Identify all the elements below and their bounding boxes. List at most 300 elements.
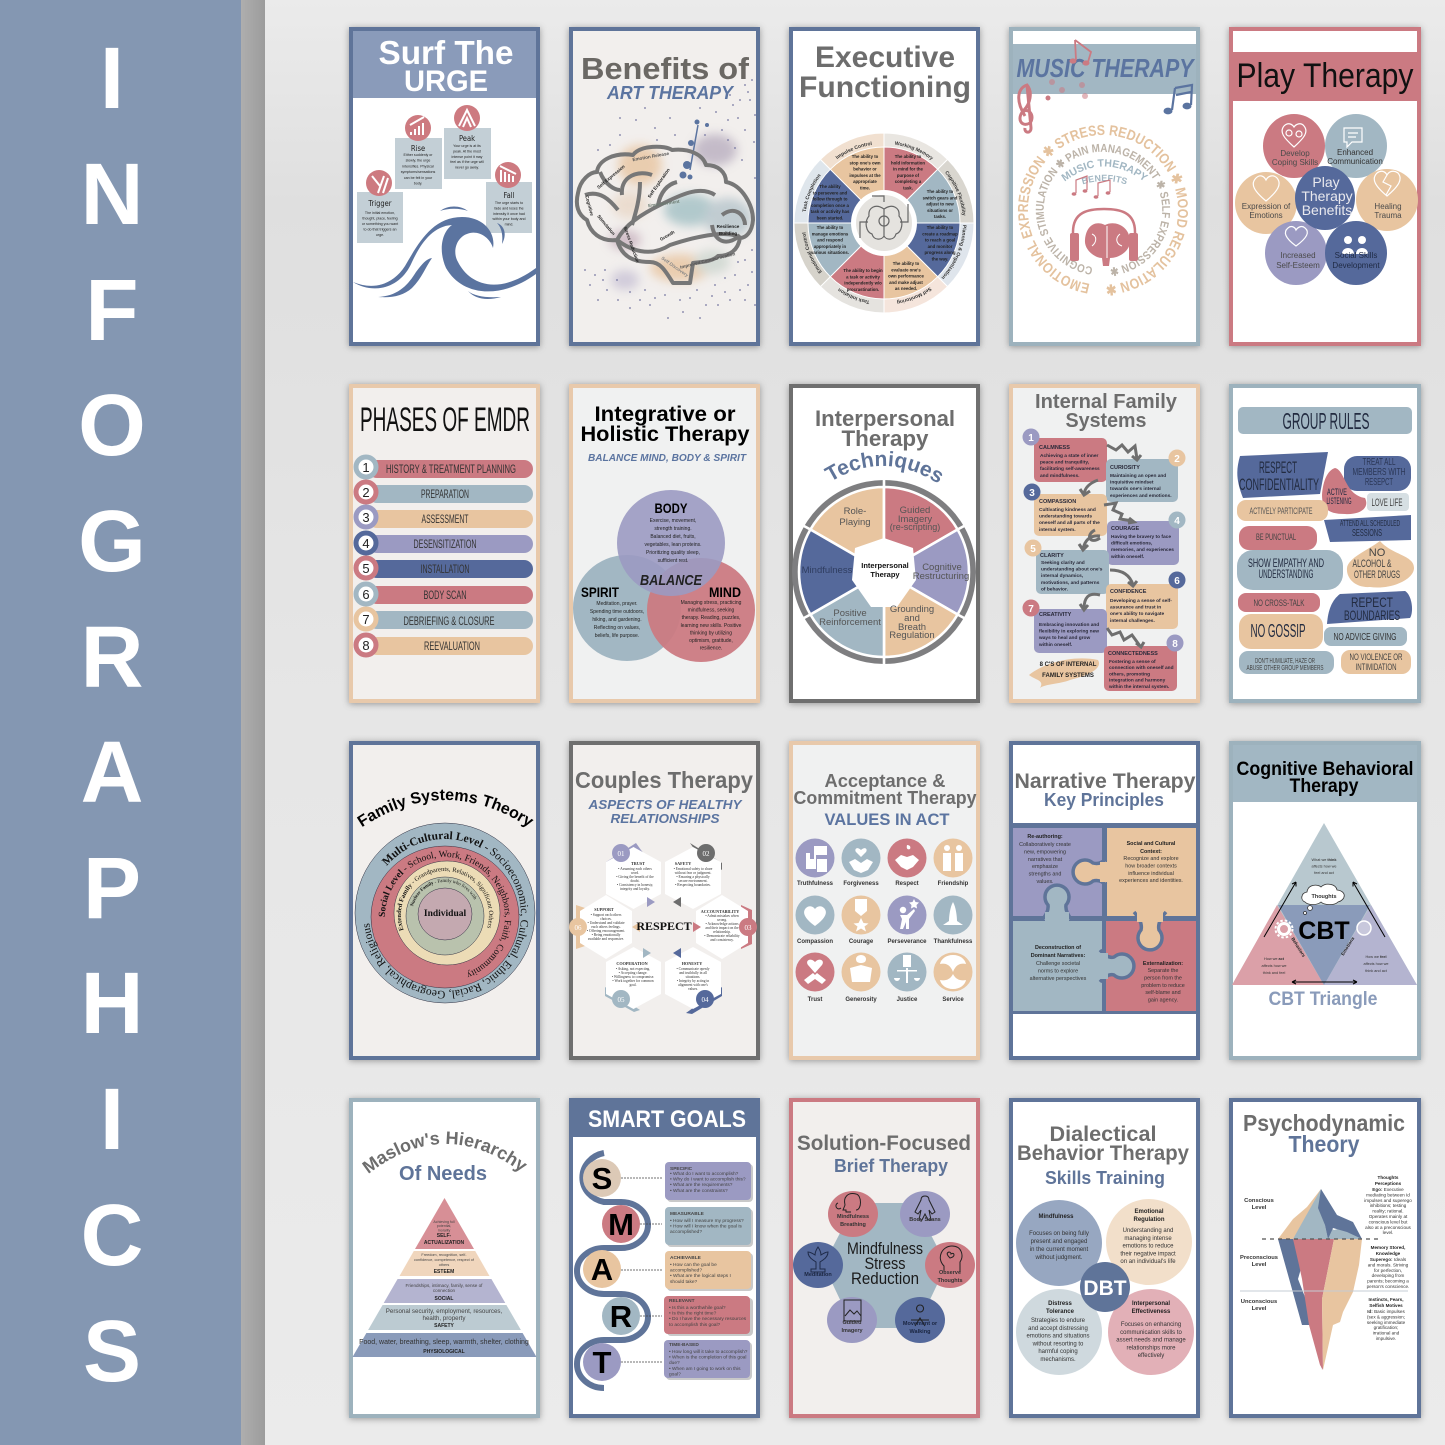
box text: towards one's internal [1110, 486, 1161, 492]
heading: Dialectical [1050, 1123, 1156, 1146]
brain labels: Cognitive [584, 195, 595, 217]
box text: integration and harmony [1109, 678, 1166, 684]
pyramid text: Achieving full [433, 1220, 455, 1224]
wheel descriptions: progress along [924, 250, 956, 255]
venn diagram: sufficient rest. [658, 558, 688, 564]
pyramid: PHYSIOLOGICAL [423, 1349, 465, 1355]
CBT triangle [1232, 823, 1417, 985]
footer label with brush stroke: FAMILY SYSTEMS [1042, 673, 1094, 679]
step text: thought, place, feeling [362, 216, 398, 220]
value icons [804, 845, 966, 989]
heading: Surf The [378, 34, 514, 71]
step text: Rise [411, 144, 425, 153]
puzzle text: narratives that [1028, 857, 1063, 863]
card: Couples Therapy [569, 742, 760, 1061]
heading: Acceptance & [824, 771, 946, 791]
phase bars: DEBRIEFING & CLOSURE [404, 614, 494, 628]
pyramid text: others [439, 1263, 449, 1267]
rule text: ACTIVE [1327, 487, 1347, 497]
header [1238, 407, 1412, 434]
wheel descriptions: adjust to new [926, 202, 954, 207]
step text: intensifies. Physical [402, 164, 434, 168]
phase bars: DESENSITIZATION [414, 537, 476, 551]
rule text: SESSIONS [1352, 527, 1382, 539]
rule text: RESEPCT [1365, 477, 1393, 488]
box text: motivations, and patterns [1041, 580, 1100, 586]
box text: and mindfulness. [1040, 473, 1079, 479]
pyramid: SAFETY [434, 1323, 455, 1329]
step text: mind. [505, 223, 513, 227]
rule text: LISTENING [1326, 496, 1352, 506]
hub label: Stress [864, 1254, 906, 1273]
hexagon text: values. [688, 987, 698, 991]
number badges: 7 [1028, 604, 1034, 615]
technique wheel: Regulation [889, 630, 935, 641]
skill circles: relationships more [1126, 1345, 1176, 1351]
puzzle text: Recognize and explore [1123, 856, 1179, 862]
wheel descriptions: The ability to [927, 189, 954, 194]
value labels: Truthfulness [797, 881, 834, 887]
venn diagram: mindfulness, seeking [688, 608, 735, 614]
hexagon text: • Giving the benefit of the [616, 875, 654, 879]
puzzle text: how broader contexts [1125, 863, 1177, 869]
heading: Maslow's Hierarchy [362, 1132, 527, 1174]
wheel descriptions: time. [860, 186, 870, 190]
step text [362, 134, 525, 237]
heading [794, 771, 976, 829]
flower labels: Healing [1374, 202, 1402, 211]
venn diagram: Exercise, movement, [650, 518, 696, 524]
hub label: Mindfulness [847, 1239, 923, 1258]
right annotations: gratification; [1374, 1325, 1398, 1330]
value labels: Thankfulness [934, 939, 973, 945]
box text: facilitating self-awareness [1040, 466, 1100, 472]
wheel ring labels: Working Memory [895, 141, 934, 160]
satellite labels: Body Scans [909, 1217, 941, 1223]
heading: Functioning [799, 71, 971, 104]
box text: within oneself. [1038, 642, 1072, 648]
value labels: Compassion [797, 939, 833, 945]
hexagon text: and truthfully in all [679, 971, 707, 975]
venn diagram: Meditation, prayer. [596, 601, 638, 607]
step text: within your body and [493, 217, 525, 221]
box text: internal dynamics, [1041, 573, 1084, 579]
value labels: Forgiveness [843, 881, 879, 887]
heading: Behavior Therapy [1017, 1142, 1189, 1165]
rule text: CONFIDENTIALITY [1239, 476, 1319, 494]
numbered badges: 06 [574, 924, 582, 932]
hexagon text: HONESTY [682, 961, 702, 966]
level labels: Level [1252, 1205, 1267, 1211]
technique wheel: Reinforcement [819, 617, 881, 628]
value circles [796, 838, 972, 992]
box text: COURAGE [1111, 526, 1139, 532]
technique wheel: Breath [898, 622, 926, 633]
technique wheel: Mindfulness [802, 565, 853, 576]
satellite labels: Imagery [841, 1328, 863, 1334]
number badges: 5 [1030, 544, 1036, 555]
heading: Benefits of [581, 51, 750, 86]
step text: Fall [503, 191, 515, 200]
flower icons [1253, 124, 1400, 246]
skill circles: on an individual's life [1120, 1259, 1176, 1265]
goal text: • When am I going to work on this [669, 1366, 741, 1372]
hexagon text: without fear or judgment. [675, 871, 711, 875]
rule text: NO GOSSIP [1250, 621, 1306, 641]
heading: Psychodynamic [1243, 1110, 1405, 1136]
card: Psychodynamic Theory [1229, 1099, 1421, 1419]
card: Internal Family Systems [1009, 385, 1200, 704]
right annotations: impulses and superego [1364, 1198, 1412, 1203]
value labels: Generosity [845, 997, 877, 1003]
puzzle text: Social and Cultural [1127, 841, 1176, 847]
right annotations: developing from [1372, 1273, 1405, 1278]
technique wheel: Interpersonal [861, 561, 909, 570]
rule text: NO CROSS-TALK [1254, 598, 1304, 608]
goal text: MEASURABLE [670, 1211, 705, 1217]
heading: ASPECTS OF HEALTHY [587, 797, 743, 812]
wheel ring labels: Cognitive Flexibility [946, 171, 966, 216]
goal text: due? [669, 1360, 680, 1366]
flower labels: Trauma [1374, 211, 1402, 220]
step text: symptoms/sensations [401, 170, 435, 174]
heading [815, 406, 955, 482]
goal text: • Is this the right time? [669, 1311, 717, 1317]
heading [575, 767, 753, 826]
wheel descriptions: The ability to [895, 154, 922, 159]
box text: one's ability to navigate [1110, 611, 1165, 617]
circular benefit text: MUSIC THERAPY [1061, 159, 1148, 182]
box text: others, promoting [1109, 671, 1150, 677]
hexagon text: word. [631, 871, 639, 875]
wheel descriptions: appropriately in [814, 244, 846, 249]
card: Maslow's Hierarchy of Needs [344, 1094, 544, 1424]
phase bars: ASSESSMENT [422, 512, 469, 526]
card: Solution-Focused Brief Therapy [789, 1099, 980, 1419]
brain labels [584, 151, 740, 278]
heading: Key Principles [1044, 790, 1164, 810]
venn diagram: thinking by utilizing [690, 630, 732, 636]
wheel descriptions: to persevere and [813, 190, 848, 195]
card: Narrative Therapy [1009, 742, 1200, 1061]
hexagon text: • Consistency in honesty, [617, 883, 653, 888]
skill circles: managing intense [1124, 1236, 1172, 1242]
triangle text: affects how we [1363, 962, 1389, 966]
hexagon text: choices. [600, 917, 612, 921]
skill circles: Mindfulness [1038, 1214, 1074, 1220]
right annotations: parents; becoming a [1367, 1279, 1409, 1284]
skill circles: effectively [1138, 1353, 1164, 1359]
card: Family Systems Theory [344, 738, 544, 1066]
wheel descriptions: impulses at the [849, 173, 881, 178]
pyramid [352, 1198, 536, 1357]
brain outline [577, 147, 753, 283]
goal text: • What are the constraints? [670, 1188, 728, 1194]
phase bars: 2 [362, 485, 370, 500]
number badges [1022, 428, 1186, 652]
hexagon text: wrong. [717, 918, 727, 922]
ring labels: Extended Family - Grandparents, Relatives, Significant Others [396, 867, 494, 932]
preconscious divider [1240, 1290, 1408, 1292]
box text: CURIOSITY [1110, 465, 1140, 471]
pyramid: ACTUALIZATION [424, 1240, 464, 1246]
wheel descriptions: behavior or [853, 167, 877, 172]
CBT triangle: Thoughts [1311, 894, 1337, 900]
level labels: Preconscious [1240, 1255, 1278, 1261]
box text [1038, 445, 1174, 690]
value labels: Service [942, 997, 964, 1003]
goal text: • How will I know when the goal is [670, 1224, 742, 1230]
goal text: TIME-BASED [669, 1342, 699, 1348]
pyramid: ESTEEM [434, 1269, 454, 1275]
skill circles: Distress [1048, 1301, 1072, 1307]
box text: experiences and emotions. [1110, 493, 1172, 499]
phase bars: BODY SCAN [424, 588, 466, 602]
wheel descriptions: and respond [817, 238, 843, 243]
step text: The urge starts to [495, 201, 523, 205]
skill circles: Focuses on enhancing [1121, 1322, 1181, 1328]
flower labels: Develop [1280, 149, 1310, 158]
hexagon text: • Understand and validate [587, 921, 625, 925]
puzzle text: experiences and identities. [1119, 878, 1183, 884]
rule text: LOVE LIFE [1372, 497, 1402, 509]
puzzle text: norms to explore [1038, 968, 1078, 974]
technique wheel: Therapy [870, 570, 900, 579]
triangle text: feel and act [1314, 871, 1335, 875]
skill circles: DBT [1083, 1277, 1127, 1300]
heading [581, 51, 750, 103]
heading: Therapy [842, 426, 929, 451]
puzzle text: influence individual [1128, 871, 1174, 877]
hexagon text: • Support each others [591, 913, 622, 917]
triangle caption: CBT Triangle [1268, 989, 1378, 1010]
venn diagram: Spending time outdoors, [590, 609, 644, 615]
wheel ring labels: Task Completion [802, 174, 821, 212]
card: Group Rules [1229, 385, 1421, 704]
box text: inquisitive mindset [1110, 480, 1154, 486]
wheel descriptions: The ability to [927, 225, 954, 230]
venn diagram: optimism, gratitude, [689, 638, 733, 644]
box text: CREATIVITY [1039, 612, 1072, 618]
triangle text [1261, 858, 1389, 975]
box text: difficult emotions, [1111, 541, 1153, 547]
right annotations: person's conscience. [1367, 1284, 1409, 1289]
hexagon text: and their impact on the [705, 926, 739, 930]
wheel descriptions: evaluate one's [891, 267, 921, 272]
right annotations: conscious level but [1369, 1219, 1408, 1224]
numbered badges: 02 [702, 850, 710, 858]
satellite labels: Mindfulness [837, 1214, 869, 1220]
header band [1013, 44, 1196, 94]
notes and treble clef [1019, 40, 1192, 132]
flower labels: Coping Skills [1272, 158, 1318, 167]
box text: Maintaining an open and [1110, 473, 1166, 479]
step text: body. [414, 182, 422, 186]
hexagon text: • Offering encouragement. [587, 929, 625, 933]
box text: understanding towards [1039, 514, 1092, 520]
skill circles: their negative impact [1120, 1251, 1176, 1257]
wheel descriptions: own performance [888, 274, 925, 279]
icon glyphs [372, 110, 516, 193]
right annotations: (sex & aggression; [1367, 1314, 1405, 1319]
box text: CONFIDENCE [1110, 589, 1147, 595]
step text: slowly, the urge [406, 159, 430, 163]
rule text: ALCOHOL & [1352, 558, 1392, 570]
numbered badges: 05 [618, 996, 625, 1004]
puzzle text: Challenge societal [1036, 961, 1080, 967]
box text: of behavior. [1041, 586, 1068, 592]
hexagon text: and consistency. [710, 938, 734, 942]
heading: Techniques [824, 451, 942, 482]
heading: Narrative Therapy [1014, 770, 1196, 793]
hexagon text: ACCOUNTABILITY [701, 909, 739, 914]
right annotations: Ego: Executive [1372, 1187, 1404, 1192]
value labels: Courage [849, 939, 874, 945]
wheel ring labels [802, 141, 966, 304]
hexagon text: alignment with one's [678, 983, 708, 987]
satellite labels: Walking [910, 1329, 930, 1335]
right annotations: Selfish Motives [1369, 1303, 1403, 1308]
step text: Either suddenly or [404, 153, 433, 157]
goal text: • Is this a worthwhile goal? [669, 1305, 726, 1311]
card: Executive Functioning [784, 24, 984, 351]
rule text: SHOW EMPATHY AND [1248, 556, 1324, 570]
letter circles [583, 1159, 640, 1381]
wheel descriptions: and monitor [928, 244, 953, 249]
gear and face icons [1276, 920, 1371, 938]
box text: within oneself. [1110, 554, 1144, 560]
wheel descriptions: as needed. [895, 286, 917, 291]
wheel descriptions: procrastination. [847, 287, 879, 292]
phase bars: PREPARATION [421, 487, 469, 501]
right annotations: and morals. Striving [1368, 1262, 1409, 1267]
CBT triangle: Behaviors [1290, 936, 1307, 958]
satellite labels: Observe [939, 1270, 961, 1276]
right annotations: Thoughts [1378, 1175, 1399, 1180]
skill circles [1016, 1199, 1194, 1375]
heading: ART THERAPY [606, 83, 735, 103]
box text: oneself and all parts of the [1039, 520, 1100, 526]
skill circles: mechanisms. [1040, 1357, 1076, 1363]
wheel descriptions: task. [903, 186, 913, 190]
wheel descriptions: and make adjust [889, 280, 923, 285]
puzzle text: strengths and [1029, 872, 1061, 878]
puzzle text: Dominant Narratives: [1031, 953, 1085, 959]
hub and satellites [793, 1191, 975, 1343]
wheel descriptions: various situations. [811, 250, 849, 255]
technique wheel: Imagery [898, 514, 932, 525]
rule text [1239, 408, 1406, 673]
triangle text: How we feel [1365, 955, 1387, 959]
skill circles: Focuses on being fully [1029, 1231, 1089, 1237]
card: Play Therapy [1229, 28, 1421, 347]
left side panel with vertical title: R [81, 609, 143, 706]
puzzle text: problem to reduce [1141, 983, 1185, 989]
wheel ring labels: Self Monitoring [897, 288, 932, 304]
wheel ring labels: Task Initiation [838, 288, 870, 304]
venn diagram: BALANCE [640, 572, 703, 589]
skill circles: Interpersonal [1132, 1301, 1170, 1307]
puzzle text: Collaboratively create [1019, 842, 1071, 848]
goal text: • What do I want to accomplish? [670, 1171, 739, 1177]
heading: URGE [404, 65, 488, 98]
triangle text: affects how we [1261, 964, 1287, 968]
technique wheel: Grounding [890, 604, 934, 615]
venn diagram: Balanced diet, fruits, [650, 534, 696, 540]
wheel descriptions: task or activity has [811, 209, 850, 214]
heading: VALUES IN ACT [824, 810, 950, 829]
rule text: NO [1369, 547, 1386, 559]
hexagon text: integrity and loyalty. [620, 887, 650, 891]
card: Cognitive Behavioral Therapy [1229, 742, 1421, 1061]
box text: Achieving a state of inner [1040, 453, 1099, 459]
number badges: 2 [1174, 454, 1180, 465]
rule text: NO ADVICE GIVING [1334, 632, 1397, 643]
skill circles: assert needs and manage [1116, 1338, 1186, 1344]
box text: flexibility in exploring new [1039, 629, 1099, 635]
hexagon text: • Demonstrate reliability [704, 934, 740, 938]
step text: Peak [459, 134, 475, 143]
iceberg [1278, 1189, 1362, 1370]
wheel descriptions: manage emotions [812, 231, 849, 236]
rule text: OTHER DRUGS [1354, 569, 1400, 581]
pyramid text: potential, [437, 1224, 451, 1228]
box text: peace and tranquility, [1040, 460, 1090, 466]
satellite labels: Breathing [840, 1222, 866, 1228]
wheel descriptions: The ability to begin [843, 268, 883, 273]
flower labels: Self-Esteem [1276, 261, 1320, 270]
right annotations: Superego: Ideals [1370, 1257, 1406, 1262]
box text: Having the bravery to face [1111, 534, 1171, 540]
skill circles: and accept distressing [1028, 1326, 1088, 1332]
phase bars: 8 [362, 638, 370, 653]
puzzle text: Separate the [1148, 968, 1178, 974]
skill circles: harmful coping [1038, 1349, 1078, 1355]
footer label with brush stroke [1029, 658, 1099, 688]
heading: Couples Therapy [575, 767, 753, 793]
value labels: Justice [897, 997, 918, 1003]
heading [1014, 770, 1196, 810]
heading [797, 1132, 971, 1176]
venn diagram: therapy. Reading, puzzles, [682, 615, 740, 621]
rule text: TREAT ALL [1362, 457, 1396, 468]
box text: COMPASSION [1039, 499, 1076, 505]
wheel descriptions: The ability to [852, 154, 879, 159]
satellite labels: Meditation [804, 1272, 832, 1278]
skill circles: emotions and situations [1026, 1334, 1090, 1340]
pyramid text: confidence, competence, respect of [414, 1258, 475, 1262]
box text: internal challenges. [1110, 618, 1155, 624]
heading: Executive [815, 41, 955, 74]
pyramid: Food, water, breathing, sleep, warmth, shelter, clothing [359, 1339, 529, 1346]
hexagon text: doubt. [630, 879, 640, 883]
triangle text: affects how we [1311, 864, 1337, 868]
number badges: 6 [1174, 576, 1180, 587]
paint splatter [585, 80, 755, 318]
pyramid text [414, 1220, 475, 1267]
thought cloud [1302, 884, 1344, 914]
step text: urge. [376, 233, 384, 237]
brain labels: Emotion Release [632, 151, 670, 162]
value labels: Respect [895, 881, 919, 887]
brain labels: Stress Reduction [623, 226, 640, 263]
goal text: to accomplish this goal? [669, 1322, 721, 1328]
phase bars: REEVALUATION [424, 639, 480, 653]
rule text: INTIMIDATION [1356, 662, 1397, 673]
technique wheel: Restructuring [913, 571, 969, 582]
level labels: Unconscious [1241, 1299, 1277, 1305]
skill circles: Tolerance [1046, 1309, 1075, 1315]
